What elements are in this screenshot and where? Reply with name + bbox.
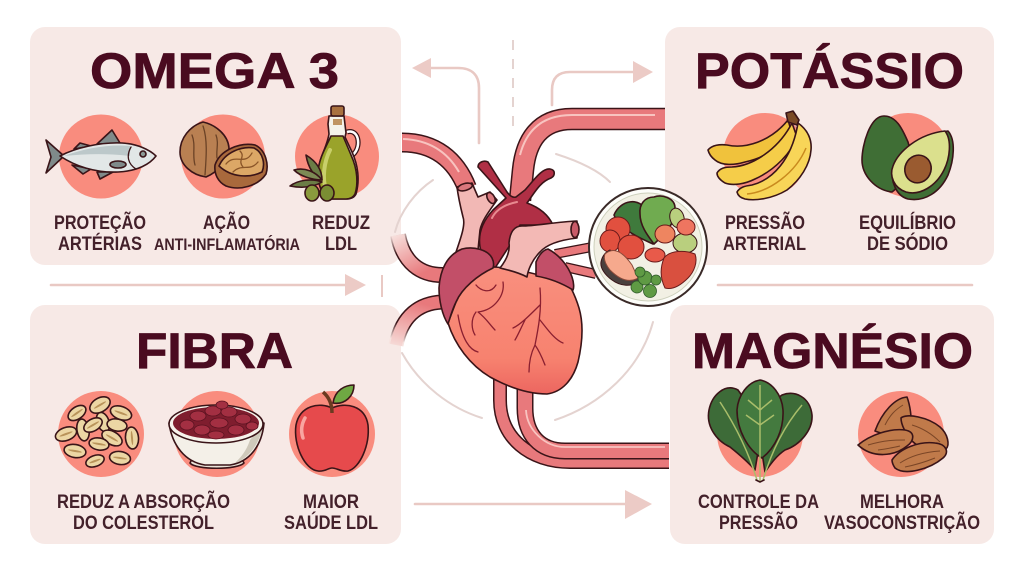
label: Proteção artérias xyxy=(54,212,146,255)
vessel: bottom outer xyxy=(500,378,669,462)
label: Equilíbrio de sódio: EQUILÍBRIO xyxy=(859,212,956,234)
tomatoes xyxy=(600,217,695,262)
dashed centre line xyxy=(512,40,514,135)
heading: Omega 3: OMEGA 3 xyxy=(90,43,339,99)
vessel: top left xyxy=(402,139,467,188)
label: Ação anti-inflamatória: ANTI-INFLAMATÓRIA xyxy=(154,235,300,254)
label: Reduz LDL xyxy=(312,213,370,255)
circulation arcs xyxy=(395,154,653,420)
pulmonary artery xyxy=(500,221,577,277)
label: Reduz a absorção do colesterol xyxy=(57,491,230,534)
heading: Potássio: POTÁSSIO xyxy=(695,43,964,99)
label: Ação anti-inflamatória: AÇÃO xyxy=(203,212,250,234)
label: Melhora vasoconstrição xyxy=(824,492,980,534)
blood vessels xyxy=(396,115,669,462)
label: Pressão arterial: ARTERIAL xyxy=(723,234,806,255)
panel: Potássio xyxy=(665,27,994,265)
label: Reduz a absorção do colesterol: REDUZ A ABSORÇÃO xyxy=(57,491,230,513)
aorta xyxy=(478,161,554,268)
arrow: top right xyxy=(552,61,653,105)
arrow: top left xyxy=(412,58,479,143)
cucumbers xyxy=(668,207,697,253)
icon: almonds xyxy=(858,391,948,477)
icon: bowl of beans xyxy=(169,391,264,477)
label: Proteção artérias: ARTÉRIAS xyxy=(58,233,142,255)
broccoli xyxy=(631,267,661,298)
heading: Fibra: FIBRA xyxy=(136,323,293,379)
vessel: plate links xyxy=(555,247,596,274)
ventricle xyxy=(448,267,582,394)
icon: fish xyxy=(46,114,156,198)
label: Melhora vasoconstrição: MELHORA xyxy=(860,492,944,513)
left atrium xyxy=(439,248,494,324)
panel: Fibra xyxy=(30,305,401,544)
panel: Magnésio xyxy=(670,305,994,544)
lettuce xyxy=(640,196,675,244)
label: Reduz LDL: LDL xyxy=(325,234,357,255)
label: Equilíbrio de sódio: DE SÓDIO xyxy=(867,233,948,255)
icon: walnut xyxy=(180,114,267,198)
label: Controle da pressão: PRESSÃO xyxy=(719,512,798,534)
label: Controle da pressão: CONTROLE DA xyxy=(698,492,819,513)
coronary veins xyxy=(458,282,563,372)
label: Maior saúde LDL: MAIOR xyxy=(303,492,359,513)
label: Pressão arterial xyxy=(723,212,806,255)
label: Melhora vasoconstrição: VASOCONSTRIÇÃO xyxy=(824,512,980,534)
icon: spinach xyxy=(708,380,812,482)
vessel: left upper xyxy=(398,235,445,275)
panel: Omega 3 xyxy=(30,27,401,265)
illustration: heart xyxy=(439,161,582,394)
label: Proteção artérias: PROTEÇÃO xyxy=(54,212,146,234)
label: Ação anti-inflamatória xyxy=(154,212,300,254)
right atrium xyxy=(536,249,574,290)
icon: olive oil xyxy=(290,106,379,201)
salmon xyxy=(601,250,640,285)
line: middle right xyxy=(718,284,972,286)
icon: bananas xyxy=(708,111,811,200)
label: Maior saúde LDL: SAÚDE LDL xyxy=(284,512,378,534)
vessel: top right xyxy=(520,115,665,200)
vessel: bottom inner xyxy=(525,388,669,451)
illustration: plate of food xyxy=(589,188,707,306)
pale vena cava xyxy=(455,183,497,255)
icon: avocado xyxy=(862,113,953,200)
label: Reduz LDL: REDUZ xyxy=(312,213,370,234)
label: Controle da pressão xyxy=(698,492,819,534)
arrow: middle left xyxy=(51,274,382,297)
icon: apple xyxy=(289,385,375,477)
label: Equilíbrio de sódio xyxy=(859,212,956,255)
spinach leaf xyxy=(614,202,653,244)
vessel: left lower xyxy=(396,302,442,345)
label: Reduz a absorção do colesterol: DO COLESTEROL xyxy=(73,513,214,534)
red meat xyxy=(661,251,696,289)
icon: oats xyxy=(53,391,144,477)
label: Pressão arterial: PRESSÃO xyxy=(725,212,805,234)
arrow: bottom xyxy=(415,490,652,519)
heading: Magnésio: MAGNÉSIO xyxy=(692,323,973,379)
label: Maior saúde LDL xyxy=(284,492,378,534)
